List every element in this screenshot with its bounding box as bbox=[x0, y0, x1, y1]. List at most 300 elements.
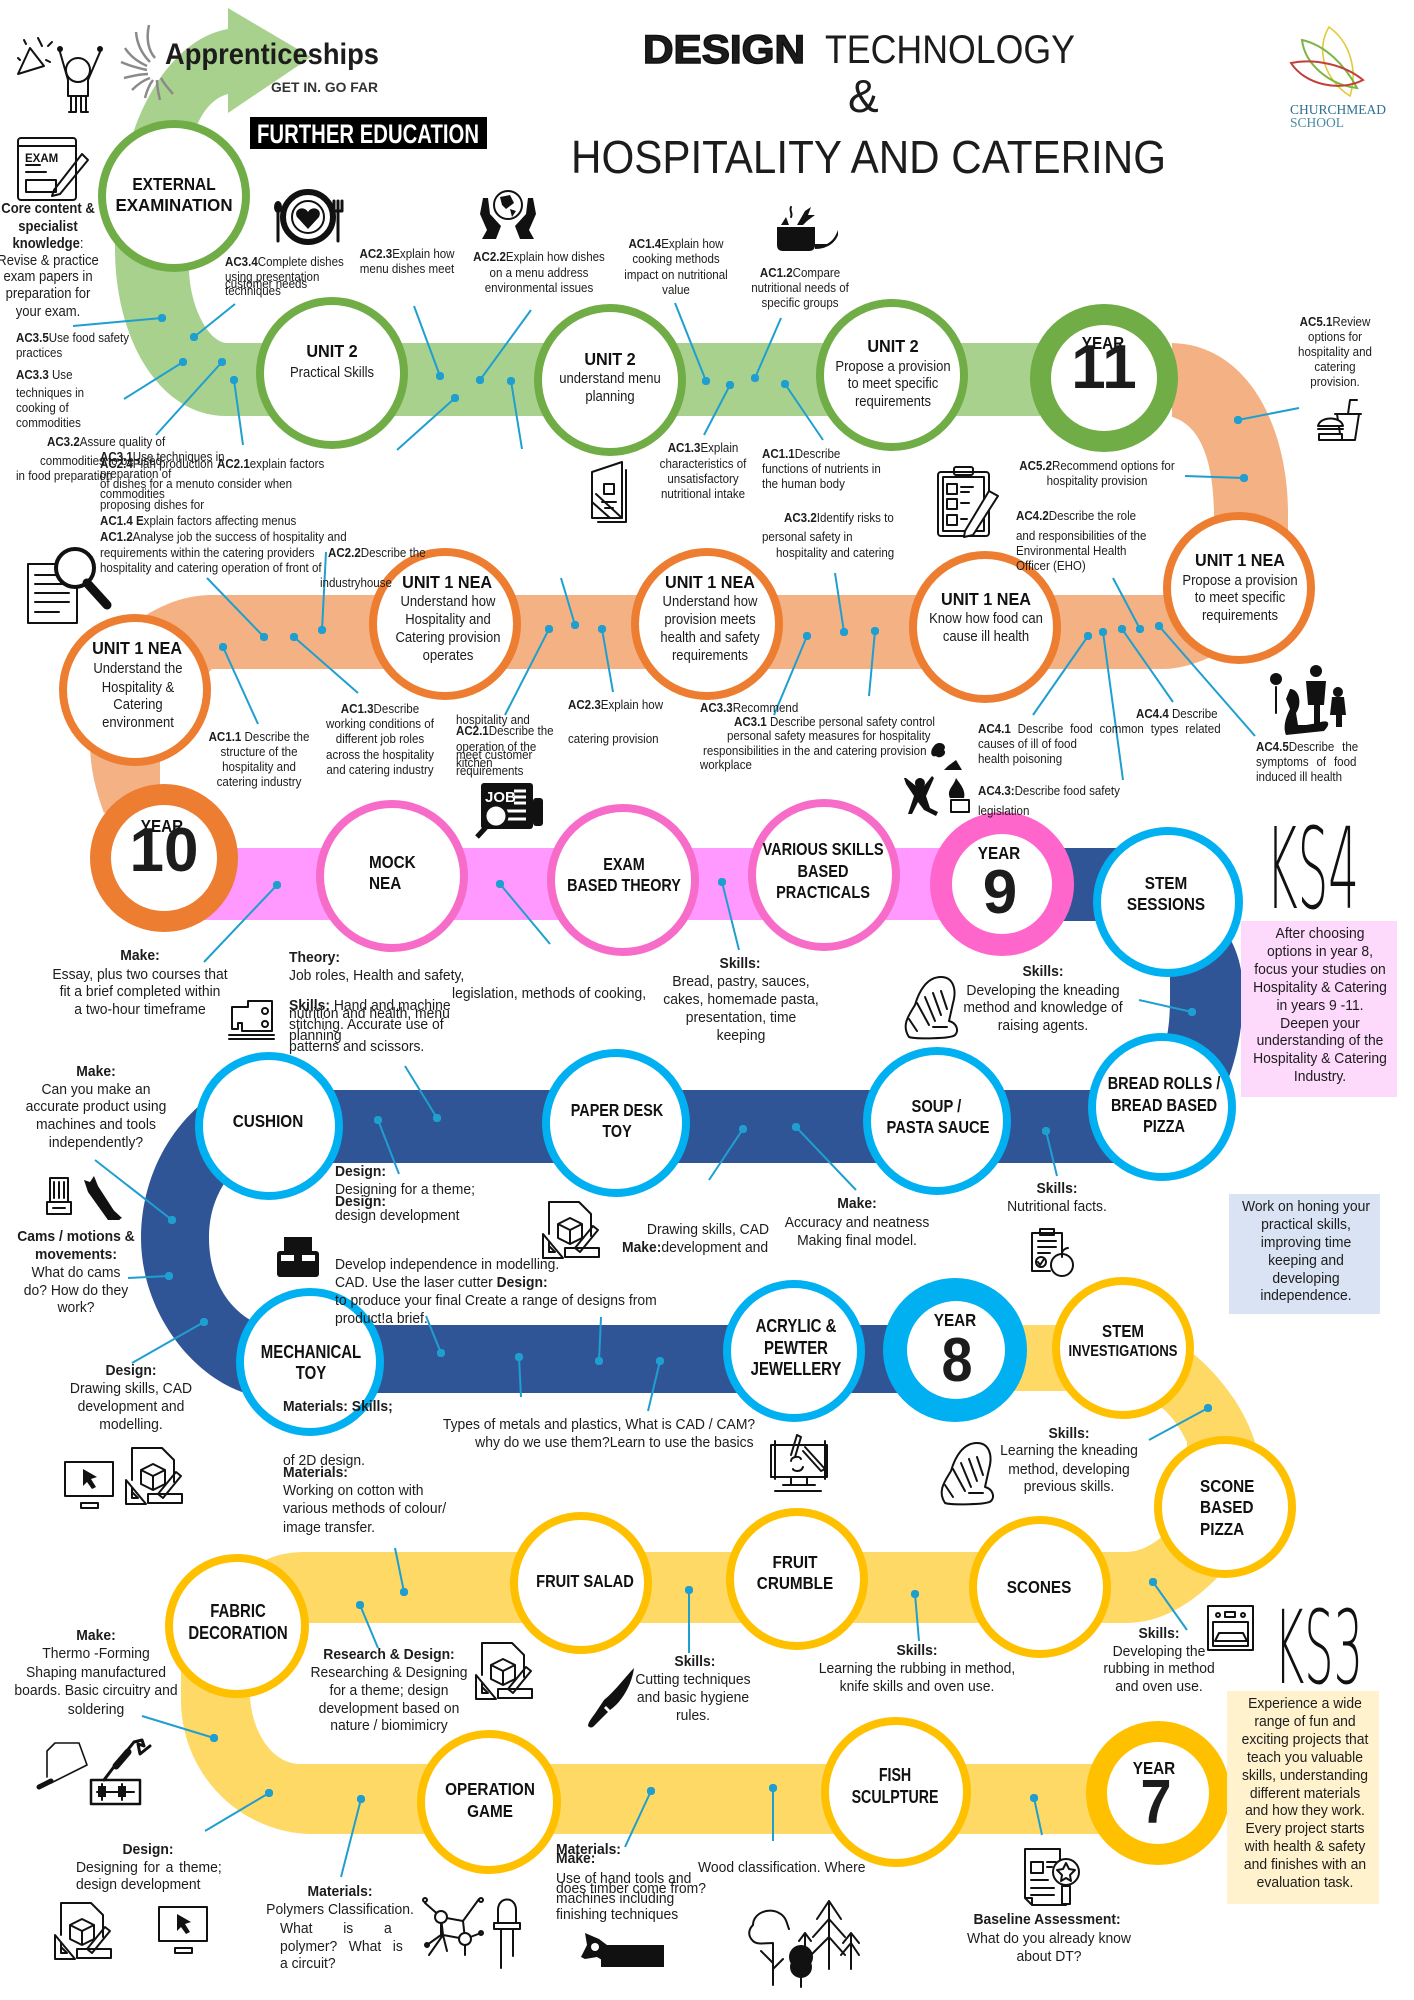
text: AC1.2 compare: specific groups bbox=[761, 296, 839, 310]
panel: KS4 description: options in year 8, bbox=[1267, 944, 1373, 960]
text: industry house: industryhouse bbox=[320, 576, 392, 590]
circle: unit 2 propose a provision: Propose a provision bbox=[835, 358, 951, 374]
circle: unit 1 NEA propose: UNIT 1 NEA bbox=[1195, 550, 1285, 570]
text: AC2.1 kitchen: AC2.1Describe the bbox=[456, 724, 554, 738]
text: core content: preparation for bbox=[6, 285, 91, 301]
text: AC5.2: hospitality provision bbox=[1047, 474, 1147, 488]
circle: unit 1 NEA operates: UNIT 1 NEA bbox=[402, 572, 492, 592]
text: materials polymers: Polymers Classification. bbox=[266, 1902, 414, 1918]
text: baseline assessment: about DT? bbox=[1017, 1949, 1082, 1965]
text: materials and make hand tools: machines including bbox=[556, 1891, 674, 1907]
text: research and design: nature / biomimicry bbox=[330, 1718, 449, 1734]
text: skills cutting: and basic hygiene bbox=[637, 1690, 749, 1706]
circle: stem investigations bbox=[1056, 1281, 1190, 1415]
text: overlapping AC list: hospitality and catering operation of front of bbox=[100, 561, 322, 575]
icon: dough hands bbox=[906, 977, 957, 1038]
text: AC5.1: provision. bbox=[1310, 375, 1360, 389]
circle: fruit salad bbox=[514, 1516, 648, 1650]
icon: knife bbox=[588, 1668, 634, 1728]
text: AC1.1 structure: hospitality and bbox=[222, 760, 296, 774]
text: cams: movements: bbox=[35, 1247, 117, 1263]
text: AC3.5: practices bbox=[16, 346, 62, 360]
text: theory: stitching. Accurate use of bbox=[289, 1017, 444, 1033]
panel: KS3 description: exciting projects that bbox=[1242, 1732, 1368, 1748]
text: core content: specialist bbox=[18, 218, 78, 234]
panel: KS3 description: evaluation task. bbox=[1257, 1875, 1353, 1891]
text: AC1.1 structure: AC1.1 Describe the bbox=[209, 730, 309, 744]
circle: fish sculpture: FISH bbox=[879, 1765, 911, 1785]
logo: Churchmead School: SCHOOL bbox=[1290, 116, 1344, 131]
panel: Year 11 units bbox=[102, 124, 1178, 452]
ribbon: green Year 11 path with arrow bbox=[115, 8, 1040, 416]
text: design theme bbox=[76, 1842, 222, 1893]
text: make accurate product: Can you make an bbox=[41, 1082, 151, 1098]
text: core content: knowledge: bbox=[13, 235, 84, 251]
circle: year 7: YEAR bbox=[1133, 1758, 1175, 1778]
circle: paper desk toy: TOY bbox=[602, 1122, 632, 1141]
icon: nutrition clipboard bbox=[1032, 1229, 1073, 1276]
circle: unit 2 practical skills: UNIT 2 bbox=[306, 341, 358, 361]
text: design drawing: Design: bbox=[105, 1363, 157, 1379]
text: overlapping AC list: preparation of bbox=[100, 467, 172, 481]
text: AC4.5: symptoms of food bbox=[1256, 755, 1356, 769]
text: materials polymers: polymer? What is bbox=[280, 1939, 403, 1955]
circle: year 9 bbox=[930, 812, 1074, 956]
leader lines: yellow path bbox=[142, 1408, 1208, 1877]
logo: Apprenticeships: Apprenticeships bbox=[165, 38, 379, 71]
text: skills kneading: raising agents. bbox=[998, 1018, 1088, 1034]
text: research and design: Researching & Designing bbox=[311, 1665, 467, 1681]
text: AC3.5: AC3.5Use food safety bbox=[16, 331, 129, 345]
panel: KS4 description: Hospitality & Catering bbox=[1253, 980, 1387, 996]
text: make accuracy: Making final model. bbox=[797, 1233, 917, 1249]
text: design theme: design development bbox=[76, 1877, 201, 1893]
circle: unit 1 NEA health and safety bbox=[635, 552, 779, 696]
text: cushion design: Develop independence in modelling. bbox=[335, 1257, 559, 1273]
circle: bread rolls: PIZZA bbox=[1143, 1117, 1185, 1136]
text: make essay: Make: bbox=[120, 948, 160, 964]
text: make accuracy: Accuracy and neatness bbox=[785, 1215, 929, 1231]
text: AC3.4: techniques bbox=[225, 284, 281, 298]
text: skills rubbing method: knife skills and oven use. bbox=[840, 1679, 994, 1695]
text: overlapping AC list: commodities bbox=[100, 487, 165, 501]
text: AC5.1: AC5.1Review bbox=[1300, 315, 1370, 329]
text: AC3.3: cooking of bbox=[16, 401, 69, 415]
text: cushion design: Design: bbox=[335, 1164, 386, 1180]
ribbon: yellow Year 7 path bbox=[181, 1525, 1240, 1834]
text: core content: Core content & bbox=[1, 200, 95, 216]
icon: computer with tools bbox=[771, 1435, 827, 1491]
icon: coping saw bbox=[39, 1743, 87, 1787]
text: skills kneading: Developing the kneading bbox=[966, 983, 1120, 999]
text: make development: Make:development and bbox=[622, 1240, 768, 1256]
circle: year 8: YEAR bbox=[934, 1310, 976, 1330]
icon: exam paper: EXAM bbox=[25, 153, 58, 165]
text: AC2.1 kitchen: operation of the bbox=[456, 740, 537, 754]
logo: Apprenticeships: GET IN. GO FAR bbox=[271, 79, 378, 95]
text: AC1.4 cooking methods: AC1.4Explain how bbox=[628, 237, 724, 251]
text: theory legislation: legislation, methods of cooking, bbox=[452, 986, 646, 1002]
text: AC2.1 kitchen: kitchen bbox=[456, 756, 493, 770]
logo: Apprenticeships bbox=[121, 25, 379, 100]
text: design drawing: Drawing skills, CAD bbox=[70, 1381, 192, 1397]
text: skills developing rubbing: rubbing in method bbox=[1103, 1661, 1215, 1677]
text: skills learning kneading: previous skills. bbox=[1024, 1479, 1114, 1495]
text: AC3.4: customer needs bbox=[225, 277, 307, 291]
text: skills nutritional facts: Nutritional facts. bbox=[1007, 1199, 1107, 1215]
text: AC1.4 cooking methods: value bbox=[662, 283, 690, 297]
text: skills kneading: Skills: bbox=[1023, 964, 1063, 980]
panel: Year 7 units bbox=[169, 1281, 1292, 1870]
text: cams: What do cams bbox=[32, 1265, 120, 1281]
circle: acrylic and pewter jewellery bbox=[727, 1284, 861, 1418]
text: AC2.3 catering provision: catering provision bbox=[568, 732, 659, 746]
text: materials skills: image transfer. bbox=[283, 1520, 375, 1536]
icon: LED bbox=[494, 1900, 520, 1968]
circle: unit 2 practical skills bbox=[260, 301, 404, 445]
text: make accurate product: Make: bbox=[76, 1064, 116, 1080]
circle: fruit crumble: CRUMBLE bbox=[757, 1573, 833, 1593]
ribbon: navy Year 9 and Year 8 path bbox=[141, 848, 1243, 1393]
circle: soup and pasta sauce: SOUP / bbox=[912, 1097, 962, 1116]
title: DESIGN bbox=[643, 28, 805, 72]
text: materials polymers: What is a bbox=[280, 1921, 392, 1937]
circle: acrylic and pewter jewellery: ACRYLIC & bbox=[756, 1316, 836, 1336]
text: AC1.3 unsatisfactory intake: AC1.3Explain bbox=[668, 441, 738, 455]
panel: KS3 description: and finishes with an bbox=[1244, 1857, 1366, 1873]
text: core content: Revise & practice bbox=[0, 252, 99, 268]
text: materials and make hand tools: Materials: bbox=[556, 1842, 621, 1858]
panel: year 8 description: improving time bbox=[1261, 1235, 1351, 1251]
text: AC3.2 commodities: commodities to be used bbox=[40, 454, 162, 468]
text: make thermo forming: Make: bbox=[76, 1628, 116, 1644]
circle: stem investigations: INVESTIGATIONS bbox=[1069, 1343, 1177, 1360]
text: make accuracy: Make: bbox=[837, 1196, 877, 1212]
circle: scone based pizza bbox=[1158, 1440, 1292, 1574]
icon: checklist clipboard bbox=[938, 467, 998, 537]
circle: unit 2 understand menu planning bbox=[538, 308, 682, 452]
text: AC4.5: AC4.5Describe the bbox=[1256, 740, 1358, 754]
icon: CAD document design bbox=[55, 1903, 111, 1959]
circle: operation game: GAME bbox=[467, 1801, 513, 1821]
icon: CAD document mechanical toy bbox=[126, 1448, 182, 1504]
circle: unit 1 NEA health and safety: health and safety bbox=[660, 629, 760, 645]
text: AC5.1: catering bbox=[1314, 360, 1356, 374]
circle: fabric decoration: DECORATION bbox=[188, 1623, 288, 1643]
circle: scone based pizza: SCONE bbox=[1200, 1476, 1254, 1496]
text: materials skills: Materials: Skills; bbox=[283, 1399, 393, 1415]
text: make accurate product: independently? bbox=[49, 1135, 143, 1151]
text: overlapping AC list: AC1.4 Explain factors affecting menus bbox=[100, 514, 296, 528]
icon: kitchen fire hazard bbox=[904, 743, 969, 816]
panel: KS4 description: in years 9 -11. bbox=[1276, 998, 1364, 1014]
circle: bread rolls: BREAD ROLLS / bbox=[1108, 1074, 1221, 1093]
text: AC4.4: AC4.4 Describe bbox=[1136, 707, 1218, 721]
text: AC4.1: AC4.1 Describe food common types related bbox=[978, 722, 1221, 736]
icon: box bbox=[277, 1237, 319, 1277]
circle: unit 2 propose a provision bbox=[820, 303, 964, 447]
text: overlapping AC list: AC1.2Analyse job the success of hospitality and bbox=[100, 530, 347, 544]
text: baseline assessment: What do you already know bbox=[967, 1931, 1132, 1947]
circle: unit 1 NEA operates: operates bbox=[423, 647, 473, 663]
text: AC3.3: AC3.3 Use bbox=[16, 368, 73, 382]
logo: Churchmead School bbox=[1290, 27, 1386, 131]
circle: unit 2 practical skills: Practical Skills bbox=[290, 364, 374, 380]
circle: unit 1 NEA ill health: UNIT 1 NEA bbox=[941, 589, 1031, 609]
icon: polymer molecule bbox=[423, 1898, 483, 1955]
circle: mock NEA: MOCK bbox=[369, 852, 416, 872]
circle: year 10 bbox=[90, 784, 238, 932]
text: wood classification: Wood classification. Where bbox=[698, 1860, 866, 1876]
circle: fruit salad: FRUIT SALAD bbox=[536, 1572, 634, 1591]
text: baseline assessment: Baseline Assessment: bbox=[974, 1912, 1121, 1928]
panel: KS3 description: skills, understanding bbox=[1242, 1768, 1368, 1784]
text: cams: Cams / motions & bbox=[17, 1229, 135, 1245]
panel: KS3 description bbox=[1227, 1691, 1379, 1904]
circle: fish sculpture bbox=[825, 1721, 967, 1863]
text: make thermo forming: boards. Basic circuitry and bbox=[14, 1683, 178, 1699]
ribbon: yellow Year 8 bend bbox=[1000, 1325, 1255, 1470]
label: further education: FURTHER EDUCATION bbox=[257, 119, 479, 149]
text: AC1.3 unsatisfactory intake: characteristics of bbox=[660, 457, 747, 471]
text: research and design: Research & Design: bbox=[323, 1647, 455, 1663]
circle: scones: SCONES bbox=[1007, 1577, 1071, 1597]
text: AC3.2 personal safety: personal safety in bbox=[762, 530, 853, 544]
text: theory: patterns and scissors. bbox=[289, 1039, 424, 1055]
text: skills rubbing method: Learning the rubbing in method, bbox=[819, 1661, 1015, 1677]
text: research and design: development based on bbox=[319, 1701, 459, 1717]
text: AC3.2 hospitality: hospitality and catering bbox=[776, 546, 894, 560]
circle: year 10: 10 bbox=[130, 816, 198, 885]
text: overlapping AC list: AC2.4Plan production bbox=[100, 457, 213, 471]
text: skills nutritional facts: Skills: bbox=[1037, 1181, 1077, 1197]
icon: sharpener machine bbox=[47, 1178, 71, 1214]
circle: unit 2 understand menu planning: planning bbox=[585, 388, 635, 404]
icon: exam paper bbox=[18, 138, 88, 200]
text: materials and make hand tools: Use of hand tools and bbox=[556, 1871, 691, 1887]
circle: stem sessions: STEM bbox=[1145, 873, 1187, 893]
text: AC3.2 identify risks: AC3.2Identify risks to bbox=[784, 511, 894, 525]
text: skills cutting: Cutting techniques bbox=[635, 1672, 751, 1688]
leader lines: peach path bbox=[207, 552, 1255, 780]
circle: year 11: 11 bbox=[1071, 333, 1137, 402]
circle: year 9: 9 bbox=[983, 858, 1017, 927]
text: types of metals: Types of metals and plastics, What is CAD / CAM? bbox=[443, 1417, 755, 1433]
title bbox=[571, 28, 1166, 183]
text: overlapping AC list: proposing dishes for bbox=[100, 498, 204, 512]
circle: mechanical toy bbox=[240, 1292, 380, 1432]
text: skills bread: Bread, pastry, sauces, bbox=[672, 974, 810, 990]
text: design drawing: development and bbox=[78, 1399, 184, 1415]
circle: unit 1 NEA ill health bbox=[913, 555, 1057, 699]
leader lines: pink and navy paths bbox=[95, 882, 1192, 1411]
text: design theme: Designing for a theme; bbox=[76, 1860, 222, 1876]
text: cushion design: CAD. Use the laser cutter Design: bbox=[335, 1275, 548, 1291]
circle: year 11: YEAR bbox=[1082, 333, 1124, 353]
icon: document with magnifier bbox=[28, 549, 107, 623]
icon: document with star magnifier bbox=[1025, 1849, 1079, 1905]
text: AC3.2 food preparation: in food preparation bbox=[16, 469, 112, 483]
text: AC4.2: and responsibilities of the bbox=[1016, 529, 1147, 543]
icon: soldering iron and circuit bbox=[91, 1740, 150, 1804]
circle: stem sessions bbox=[1097, 831, 1239, 973]
circle: external examination: EXAMINATION bbox=[115, 195, 233, 215]
panel: KS4 description: Deepen your bbox=[1280, 1016, 1360, 1032]
text: theory: planning bbox=[289, 1028, 342, 1044]
circle: year 9: YEAR bbox=[978, 843, 1020, 863]
text: theory: nutrition and health, menu bbox=[289, 1006, 450, 1022]
circle: unit 2 propose a provision: UNIT 2 bbox=[867, 336, 919, 356]
circle: external examination bbox=[102, 124, 246, 268]
text: AC3.1 measures: personal safety measures for hospitality bbox=[727, 729, 931, 743]
text: AC1.2 compare: nutritional needs of bbox=[751, 281, 849, 295]
icon: celebrating child bbox=[18, 38, 103, 112]
text: skills cutting: rules. bbox=[676, 1708, 710, 1724]
text: AC4.3: legislation bbox=[978, 804, 1029, 818]
circle: fruit crumble: FRUIT bbox=[772, 1552, 818, 1572]
text: AC5.1: options for bbox=[1308, 330, 1362, 344]
icon: zip tool bbox=[84, 1176, 122, 1220]
circle: external examination: EXTERNAL bbox=[132, 174, 216, 194]
text: AC1.3 job roles: and catering industry bbox=[326, 763, 434, 777]
circle: bread rolls: BREAD BASED bbox=[1111, 1096, 1217, 1115]
text: AC3.2 assure quality: AC3.2Assure quality of bbox=[47, 435, 166, 449]
text: AC3.4: AC3.4Complete dishes bbox=[225, 255, 344, 269]
text: skills bread: cakes, homemade pasta, bbox=[663, 992, 819, 1008]
circle: fabric decoration: FABRIC bbox=[210, 1601, 266, 1621]
text: theory: Job roles, Health and safety, bbox=[289, 968, 464, 984]
title: & bbox=[848, 70, 879, 122]
text: AC2.1 explain factors: AC2.1explain factors bbox=[217, 457, 324, 471]
text: AC1.1 structure: structure of the bbox=[220, 745, 298, 759]
text: skills developing rubbing: and oven use. bbox=[1115, 1679, 1203, 1695]
circle: unit 1 NEA environment: Understand the bbox=[93, 660, 183, 676]
text: materials and make hand tools: Make: bbox=[556, 1851, 595, 1867]
icon: CAD document research bbox=[476, 1643, 532, 1699]
text: skills learning kneading: Learning the kneading bbox=[1000, 1443, 1138, 1459]
panel: KS4 description: Industry. bbox=[1294, 1069, 1346, 1085]
text: types of metals: why do we use them?Learn to use the basics bbox=[474, 1435, 754, 1451]
text: AC2.1 kitchen: hospitality and bbox=[456, 713, 530, 727]
text: AC2.2: environmental issues bbox=[485, 281, 593, 295]
text: cams: work? bbox=[56, 1300, 95, 1316]
text: skills bread: keeping bbox=[717, 1028, 765, 1044]
circle: year 8: 8 bbox=[941, 1326, 973, 1395]
circle: various skills based practicals: BASED bbox=[798, 862, 849, 881]
logo: Churchmead School: CHURCHMEAD bbox=[1290, 103, 1386, 118]
circle: unit 1 NEA health and safety: Understand how bbox=[663, 593, 758, 609]
circle: various skills based practicals: PRACTICALS bbox=[776, 883, 870, 902]
text: overlapping AC list: AC3.1Use techniques in bbox=[100, 450, 225, 464]
circle: various skills based practicals: VARIOUS SKILLS bbox=[762, 840, 884, 859]
text: AC1.3 job roles: different job roles bbox=[336, 732, 424, 746]
circle: scones bbox=[973, 1520, 1107, 1654]
text: theory: Skills: Hand and machine bbox=[289, 998, 451, 1014]
circle: mock NEA bbox=[320, 804, 464, 948]
circle: scone based pizza: PIZZA bbox=[1200, 1519, 1244, 1539]
text: AC1.3 job roles: AC1.3Describe bbox=[341, 702, 419, 716]
circle: fruit crumble bbox=[730, 1512, 864, 1646]
circle: fabric decoration bbox=[169, 1558, 305, 1694]
leader lines: green path bbox=[73, 303, 1299, 478]
text: materials polymers bbox=[266, 1884, 414, 1972]
text: AC1.3 job roles: across the hospitality bbox=[326, 748, 434, 762]
text: AC3.1 responsibilities: responsibilities in the and catering provision bbox=[703, 744, 927, 758]
text: AC1.1 nutrients: functions of nutrients in bbox=[762, 462, 881, 476]
panel: KS3 description: with health & safety bbox=[1244, 1839, 1366, 1855]
text: AC4.2: Environmental Health bbox=[1016, 544, 1126, 558]
panel: year 8 description: independence. bbox=[1260, 1288, 1352, 1304]
text: AC2.1 kitchen: requirements bbox=[456, 764, 523, 778]
icon: sewing machine bbox=[229, 1001, 274, 1039]
text: AC4.3: AC4.3:Describe food safety bbox=[978, 784, 1120, 798]
circle: unit 1 NEA operates: Catering provision bbox=[395, 629, 501, 645]
circle: acrylic and pewter jewellery: JEWELLERY bbox=[751, 1359, 841, 1379]
ribbon: pink Year 9 path bbox=[200, 848, 1020, 920]
text: skills developing rubbing: Skills: bbox=[1139, 1626, 1179, 1642]
text: skills rubbing method: Skills: bbox=[897, 1643, 937, 1659]
title: TECHNOLOGY bbox=[825, 28, 1075, 72]
text: AC2.2: on a menu address bbox=[490, 266, 588, 280]
text: AC1.3 unsatisfactory intake: nutritional intake bbox=[661, 487, 745, 501]
icon: dough hands second bbox=[942, 1443, 993, 1504]
panel: year 8 description: keeping and bbox=[1268, 1253, 1344, 1269]
circle: unit 2 propose a provision: requirements bbox=[855, 393, 931, 409]
text: skills bread: Skills: bbox=[720, 956, 761, 972]
circle: stem investigations: STEM bbox=[1102, 1321, 1144, 1341]
text: AC4.2: AC4.2Describe the role bbox=[1016, 509, 1136, 523]
panel: Year 9 units bbox=[320, 803, 1239, 973]
text: AC1.1 nutrients: AC1.1Describe bbox=[762, 447, 840, 461]
circle: acrylic and pewter jewellery: PEWTER bbox=[764, 1338, 828, 1358]
text: AC4.5: induced ill health bbox=[1256, 770, 1342, 784]
panel: KS3 description: Every project starts bbox=[1245, 1821, 1365, 1837]
panel: Year 10 units bbox=[63, 516, 1311, 932]
text: AC3.3: techniques in bbox=[16, 386, 84, 400]
panel: Year 8 units bbox=[199, 1037, 1232, 1432]
text: AC3.3 recommend: AC3.3Recommend bbox=[700, 701, 798, 715]
text: AC2.2 describe: AC2.2Describe the bbox=[328, 546, 426, 560]
circle: year 8 bbox=[883, 1278, 1027, 1422]
text: AC3.3: commodities bbox=[16, 416, 81, 430]
panel: KS4 description: After choosing bbox=[1276, 926, 1364, 942]
text: research and design: for a theme; design bbox=[329, 1683, 449, 1699]
circle: exam based theory: EXAM bbox=[603, 855, 645, 874]
circle: operation game bbox=[421, 1734, 557, 1870]
circle: scone based pizza: BASED bbox=[1200, 1497, 1254, 1517]
text: design drawing: modelling. bbox=[99, 1417, 163, 1433]
text: skills bread: presentation, time bbox=[686, 1010, 796, 1026]
text: AC2.3: menu dishes meet bbox=[360, 262, 455, 276]
panel: KS4 description bbox=[1241, 921, 1397, 1097]
ribbon: peach upper bend bbox=[1172, 343, 1288, 550]
icon: trees bbox=[749, 1901, 859, 1987]
icon: CAD document cushion row bbox=[543, 1202, 599, 1258]
circle: unit 1 NEA operates: Understand how bbox=[401, 593, 496, 609]
text: make thermo forming: Thermo -Forming bbox=[42, 1646, 150, 1662]
text: drawing skills CAD: Drawing skills, CAD bbox=[647, 1222, 769, 1238]
circle: unit 1 NEA environment: Catering bbox=[113, 696, 163, 712]
icon: people with food illness bbox=[1270, 665, 1346, 735]
circle: unit 1 NEA propose bbox=[1167, 516, 1311, 660]
text: cushion design: to produce your final Create a range of designs from bbox=[335, 1293, 657, 1309]
text: AC2.3: AC2.3Explain how bbox=[359, 247, 455, 261]
circle: unit 1 NEA ill health: cause ill health bbox=[943, 628, 1029, 644]
text: AC1.3 job roles: working conditions of bbox=[325, 717, 435, 731]
text: materials skills: of 2D design. bbox=[283, 1453, 365, 1469]
text: make thermo forming: soldering bbox=[68, 1702, 124, 1718]
text: AC4.2: Officer (EHO) bbox=[1016, 559, 1086, 573]
